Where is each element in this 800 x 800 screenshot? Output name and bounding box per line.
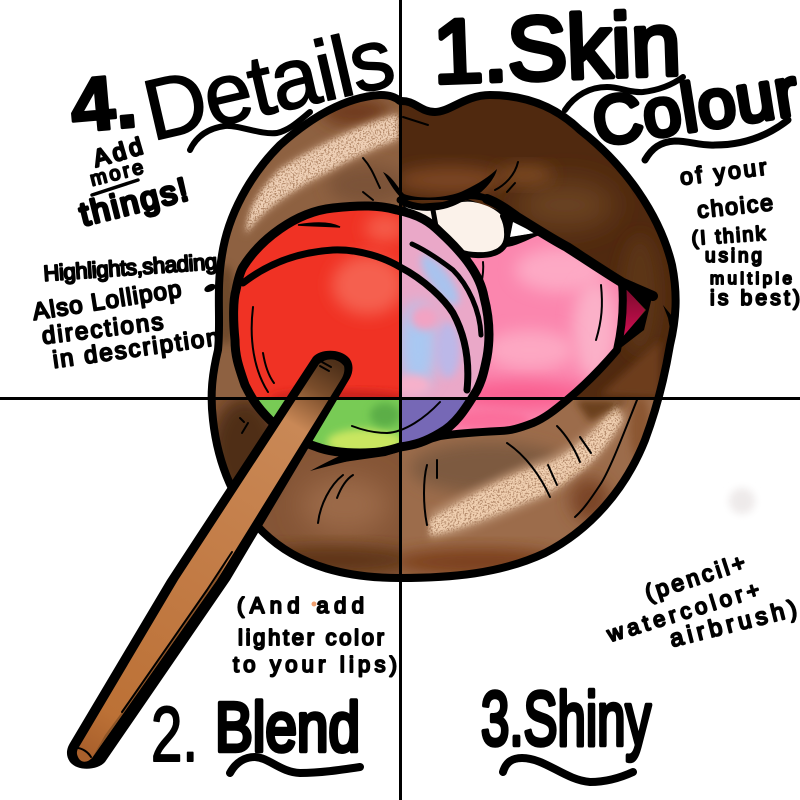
mouth interior shadow — [403, 200, 625, 433]
mouth line and tongue outline — [310, 169, 653, 471]
text: of your choice: of your — [678, 154, 768, 190]
lip wrinkles — [240, 117, 672, 525]
text: highlights and shading note: Highlights,shading — [43, 249, 218, 286]
heading: 4. Details: 4. — [67, 59, 140, 149]
teeth — [403, 202, 535, 254]
lips outline — [212, 95, 676, 578]
lollipop: blue and pink quadrant — [402, 216, 484, 397]
text: of your choice — [678, 154, 800, 310]
text: lighter color note: lighter color — [238, 625, 384, 650]
smudge mark — [729, 488, 755, 514]
panel: upper-right lip, skin colour quadrant — [402, 99, 672, 397]
text: of your choice: using — [705, 246, 762, 267]
lollipop stick — [67, 351, 352, 769]
heading: 3. Shiny: 3.Shiny — [481, 677, 651, 762]
heading: 2. Blend — [151, 688, 360, 778]
heading: 1. Skin Colour: Colour — [587, 54, 800, 161]
text: lighter color note: (And add — [237, 593, 364, 618]
text: add more things: things! — [76, 170, 191, 233]
lollipop — [225, 200, 495, 458]
text: pencil watercolor airbrush note: (pencil+ — [642, 549, 748, 606]
text: highlights and shading note: Also Lollipop — [31, 276, 183, 326]
heading: 2. Blend: 2. — [151, 690, 198, 778]
lollipop: green quadrant — [258, 400, 399, 448]
text: of your choice: (I think — [691, 223, 767, 250]
text: pencil watercolor airbrush note: airbrush) — [667, 595, 800, 653]
text: highlights and shading note — [31, 249, 221, 374]
panel: lower-left lip, blend quadrant — [216, 400, 399, 574]
text: add more things: more — [88, 156, 146, 191]
panel: lower-right lip, shiny quadrant — [402, 400, 654, 574]
lollipop: purple quadrant — [402, 400, 466, 442]
text: highlights and shading note: directions — [40, 308, 165, 350]
lollipop bands and creases — [243, 223, 481, 433]
dark red mouth corner — [620, 287, 645, 342]
text: add more things: Add — [90, 133, 146, 173]
heading: 3. Shiny — [481, 677, 651, 782]
lollipop: red quadrant — [238, 210, 399, 397]
text: highlights and shading note: in description — [51, 324, 221, 374]
heading: 1. Skin Colour — [431, 0, 800, 161]
heading: 4. Details: Details — [135, 9, 403, 160]
text: pencil watercolor airbrush note — [603, 549, 800, 653]
lollipop outline — [234, 206, 489, 453]
text: add more things — [76, 133, 191, 233]
lips illustration — [200, 85, 690, 583]
text: of your choice: is best) — [710, 287, 800, 310]
tongue — [440, 235, 621, 433]
text: of your choice: choice — [696, 189, 774, 223]
text: pencil watercolor airbrush note: watercolor+ — [603, 577, 763, 647]
heading: 2. Blend: Blend — [215, 688, 360, 766]
panel: upper-left lip, details quadrant — [216, 99, 399, 397]
text: lighter color note: to your lips) — [233, 652, 397, 677]
text: of your choice: multiple — [710, 269, 792, 288]
text: lighter color note — [233, 593, 397, 677]
